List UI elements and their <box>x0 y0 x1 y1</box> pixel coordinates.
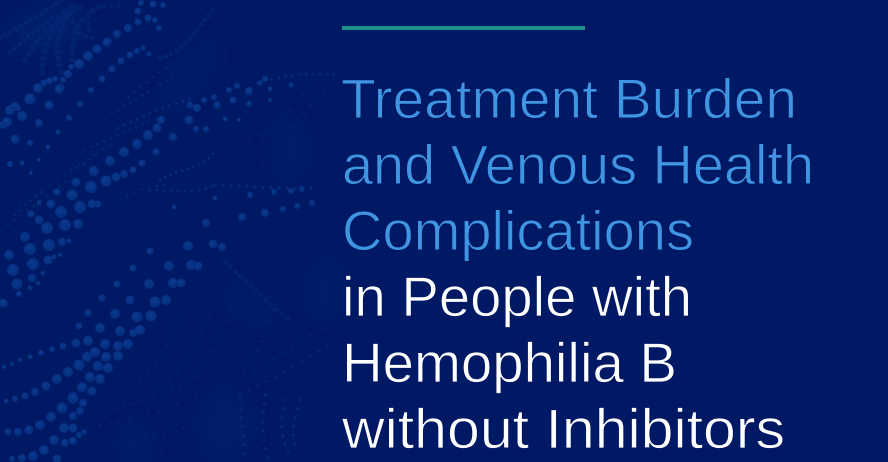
title: white subject lines <box>341 265 785 460</box>
title <box>341 67 814 460</box>
title: white subject lines: without Inhibitors <box>341 397 785 460</box>
title: white subject lines: Hemophilia B <box>342 331 677 394</box>
title: white subject lines: in People with <box>342 265 692 328</box>
accent line <box>342 26 585 30</box>
title: blue heading lines: Complications <box>342 199 694 262</box>
title: blue heading lines <box>341 67 814 262</box>
title: blue heading lines: Treatment Burden <box>341 67 797 130</box>
title: blue heading lines: and Venous Health <box>342 133 814 196</box>
decorative bead pattern <box>0 0 343 462</box>
